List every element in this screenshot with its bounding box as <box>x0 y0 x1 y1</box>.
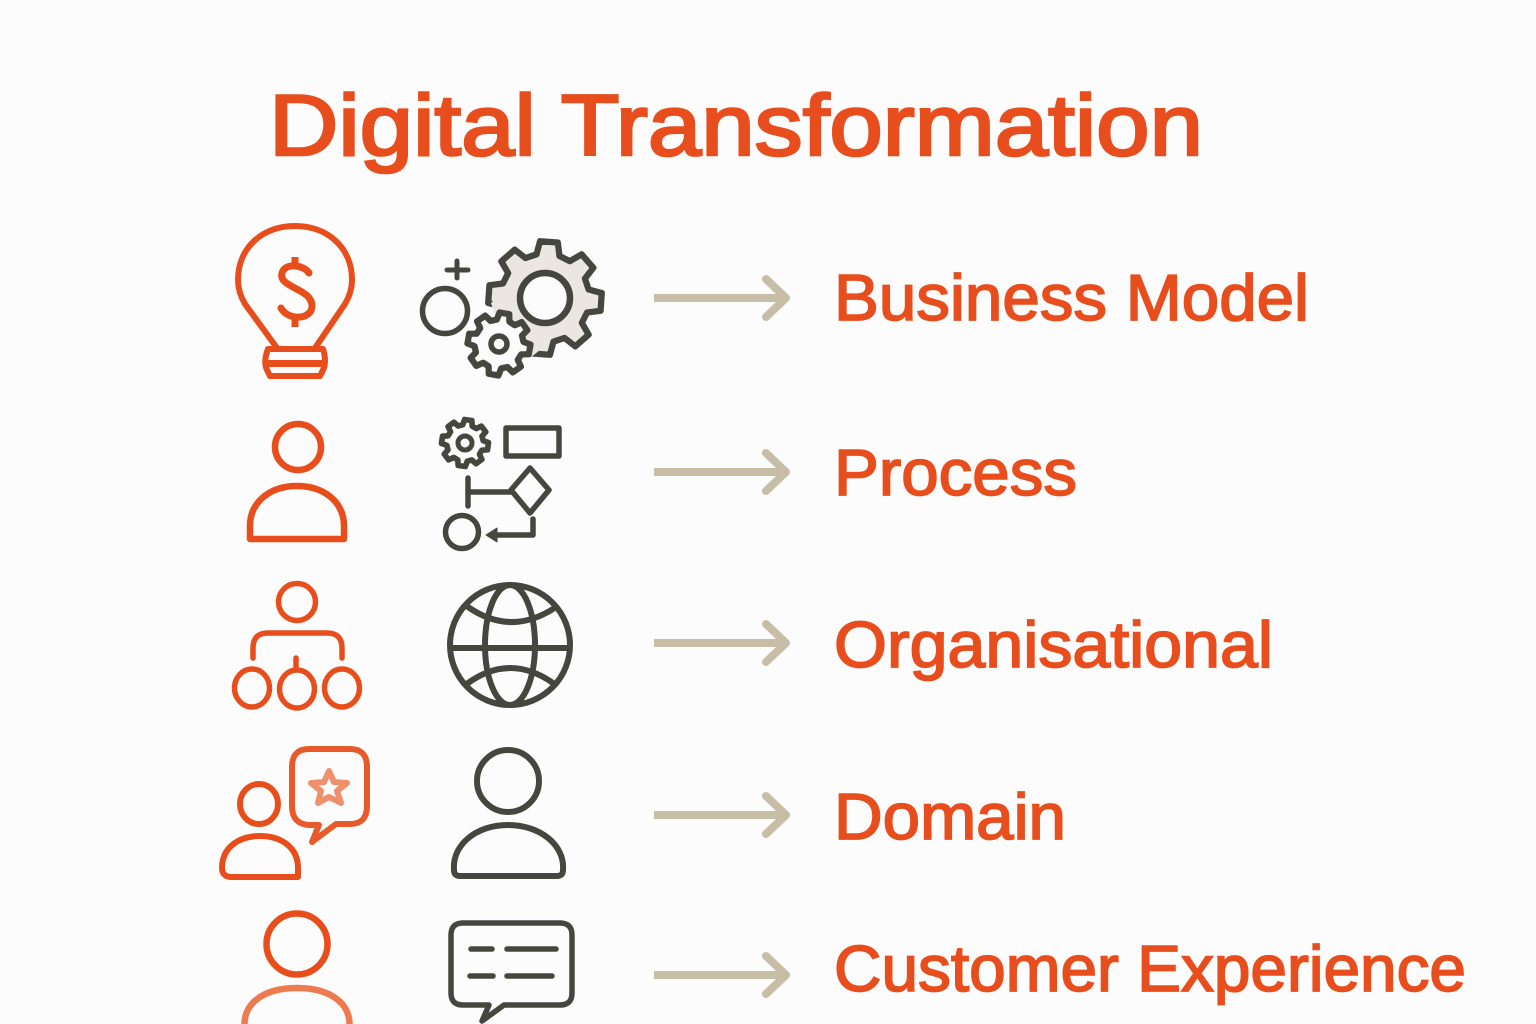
label: business model: Business Model <box>834 261 1309 334</box>
arrow: domain <box>654 796 786 834</box>
icon: organisation chart <box>234 584 360 708</box>
icon: person cut off at bottom <box>245 914 349 1024</box>
icon: chat bubble with lines <box>451 923 572 1021</box>
arrow: business model <box>654 279 786 317</box>
icon: gears with circle and plus <box>422 238 605 380</box>
title: Digital Transformation <box>269 78 1203 174</box>
label: customer experience: Customer Experience <box>834 932 1466 1005</box>
icon: globe <box>450 585 570 705</box>
icon: process flow <box>439 417 559 548</box>
arrow: organisational <box>654 624 786 662</box>
icon: person <box>250 424 344 539</box>
icon: customer with star speech bubble <box>222 749 367 877</box>
label: domain: Domain <box>834 780 1066 853</box>
icon: person <box>454 750 563 876</box>
arrow: customer experience <box>654 956 786 994</box>
label: process: Process <box>834 436 1077 509</box>
label: organisational: Organisational <box>834 608 1273 681</box>
icon: light bulb with dollar sign <box>238 226 352 376</box>
arrow: process <box>654 453 786 491</box>
